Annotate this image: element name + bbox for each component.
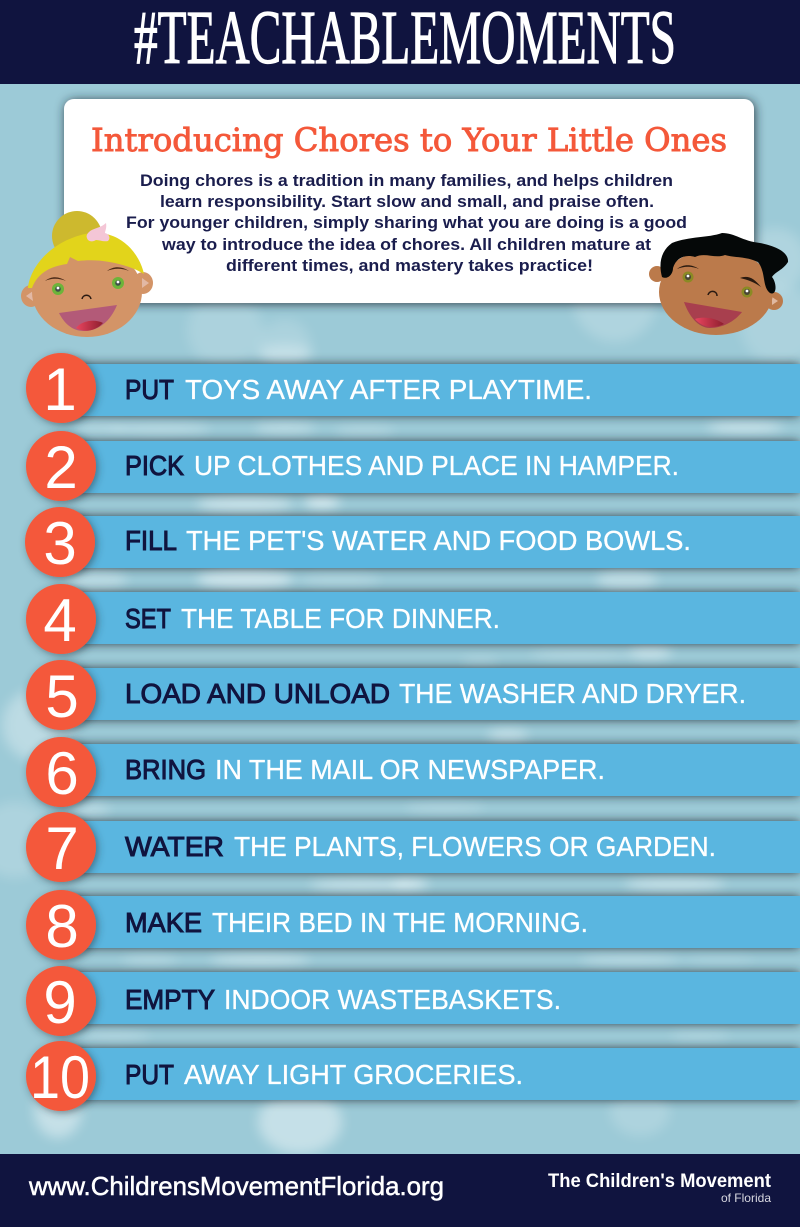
chore 8: THEIR BED IN THE MORNING. — [212, 907, 588, 938]
chore 1: 1 — [43, 356, 77, 423]
card body text: For younger children, simply sharing what you are doing is a good — [126, 213, 687, 232]
card body text: different times, and mastery takes practice! — [226, 256, 593, 275]
chore 3: 3 — [43, 510, 77, 577]
organisation logo text: of Florida — [721, 1191, 771, 1205]
card body text — [126, 171, 687, 275]
card body text: Doing chores is a tradition in many families, and helps children — [140, 171, 673, 190]
chore 10: AWAY LIGHT GROCERIES. — [184, 1059, 523, 1090]
organisation logo text — [548, 1171, 772, 1205]
chore 2: UP CLOTHES AND PLACE IN HAMPER. — [194, 450, 679, 481]
organisation logo text: The Children's Movement — [548, 1171, 772, 1192]
chore 10: 10 — [30, 1044, 90, 1111]
chore 7: WATER — [125, 831, 224, 862]
chore 4 — [26, 584, 800, 654]
chore 4: 4 — [43, 587, 77, 654]
chore 3: THE PET'S WATER AND FOOD BOWLS. — [186, 525, 691, 556]
chore 7: THE PLANTS, FLOWERS OR GARDEN. — [234, 831, 716, 862]
chore 9: INDOOR WASTEBASKETS. — [224, 984, 561, 1015]
chore 5: THE WASHER AND DRYER. — [399, 678, 746, 709]
title banner — [0, 0, 800, 84]
chore 4: THE TABLE FOR DINNER. — [181, 603, 500, 634]
chore 1 — [26, 353, 800, 423]
chore 10: PUT — [125, 1059, 174, 1090]
chore 2: PICK — [125, 450, 184, 481]
chore 9 — [26, 966, 800, 1036]
card body text: way to introduce the idea of chores. All children mature at — [161, 235, 651, 254]
chore 8: MAKE — [125, 907, 202, 938]
chore 6: 6 — [45, 740, 79, 807]
chore 8: 8 — [45, 893, 79, 960]
chore 1: TOYS AWAY AFTER PLAYTIME. — [185, 374, 592, 405]
chore 3 — [25, 507, 800, 577]
chore 6: IN THE MAIL OR NEWSPAPER. — [215, 754, 605, 785]
chore 6: BRING — [125, 754, 206, 785]
chore 8 — [26, 890, 800, 960]
chore 5: 5 — [45, 663, 79, 730]
chore 7 — [26, 812, 800, 882]
chore 9: 9 — [43, 969, 77, 1036]
chore 7: 7 — [45, 815, 79, 882]
chore 5: LOAD AND UNLOAD — [125, 678, 390, 709]
icon: boy face — [649, 233, 788, 335]
icon: girl face — [21, 211, 153, 337]
chore list — [25, 353, 800, 1111]
chore 5 — [26, 660, 800, 730]
card heading: Introducing Chores to Your Little Ones — [91, 121, 727, 159]
intro card — [64, 99, 754, 303]
chore 10 — [26, 1041, 800, 1111]
chore 9: EMPTY — [125, 984, 215, 1015]
chore 2: 2 — [44, 434, 78, 501]
chore 4: SET — [125, 603, 171, 634]
chore 6 — [26, 737, 800, 807]
card body text: learn responsibility. Start slow and small, and praise often. — [160, 192, 654, 211]
chore 2 — [26, 431, 800, 501]
website url: www.ChildrensMovementFlorida.org — [28, 1171, 444, 1201]
chore 1: PUT — [125, 374, 174, 405]
chore 3: FILL — [125, 525, 177, 556]
footer — [0, 1154, 800, 1227]
